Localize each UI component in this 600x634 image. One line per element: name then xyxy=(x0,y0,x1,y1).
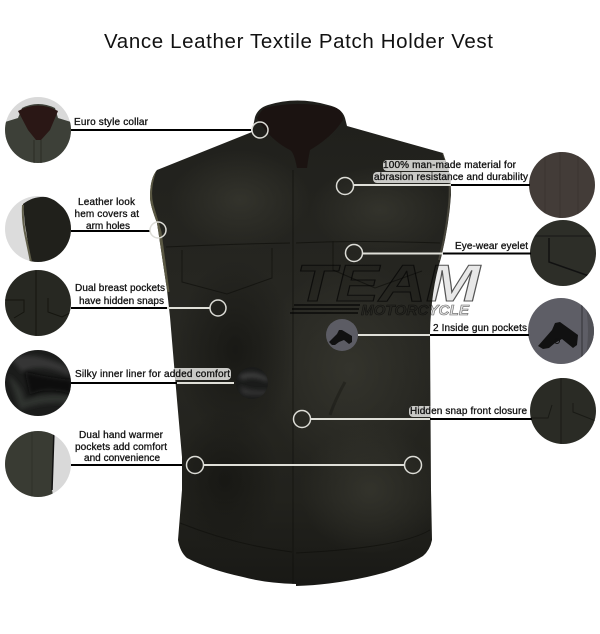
fabric shading xyxy=(206,174,414,528)
callout: Dual breast pockets: Dual breast pockets xyxy=(75,283,165,294)
callout: man-made material xyxy=(336,160,530,194)
inset: gun pocket on vest xyxy=(326,319,358,351)
thumbnail: hand warmer pockets xyxy=(5,431,71,497)
left armhole trim xyxy=(151,170,168,292)
title: Vance Leather Textile Patch Holder Vest xyxy=(104,30,493,53)
thumbnail: silky inner liner xyxy=(5,350,72,416)
callout: Eye-wear eyelet xyxy=(346,241,531,262)
logo: Team Motorcycle: MOTORCYCLE xyxy=(361,302,470,319)
logo: Team Motorcycle: TEAM xyxy=(296,255,482,313)
callout: Euro style collar xyxy=(71,117,268,138)
callout: Hidden snap front closure: Hidden snap front closure xyxy=(410,406,527,417)
callout: Leather look hem xyxy=(71,197,166,238)
inner collar xyxy=(257,104,343,168)
callout: 2 Inside gun pockets: 2 Inside gun pockets xyxy=(433,323,527,334)
thumbnail: Leather look hem xyxy=(5,196,72,265)
callout: Euro style collar: Euro style collar xyxy=(74,117,149,128)
callout: Dual hand warmer pockets: Dual hand warmer xyxy=(79,430,164,441)
callout: Eye-wear eyelet: Eye-wear eyelet xyxy=(455,241,528,252)
thumbnail: breast pockets xyxy=(5,270,72,336)
callout: Leather look hem: Leather look xyxy=(78,197,136,208)
seams and placket xyxy=(166,170,440,584)
thumbnail: hidden snap closure xyxy=(530,378,596,444)
callout: man-made material: abrasion resistance and durability xyxy=(374,172,528,183)
inset: silky liner on vest xyxy=(238,371,268,396)
callout: Dual breast pockets xyxy=(71,283,226,316)
thumbnail: gun pockets xyxy=(528,298,596,365)
callout: man-made material: 100% man-made material for xyxy=(383,160,517,171)
thumbnail: eye-wear eyelet xyxy=(530,220,596,286)
callout: Dual hand warmer pockets xyxy=(71,430,422,474)
callout: Dual breast pockets: have hidden snaps xyxy=(79,296,164,307)
callout: Silky inner liner: Silky inner liner for added comfort xyxy=(75,369,230,380)
callout: Dual hand warmer pockets: and convenience xyxy=(84,453,160,464)
thumbnail: man-made material xyxy=(529,152,595,218)
text halos over vest xyxy=(170,160,463,417)
callout: Dual hand warmer pockets: pockets add comfort xyxy=(75,442,167,453)
thumbnail: Euro style collar xyxy=(5,97,71,165)
callout: Hidden snap front closure xyxy=(294,406,532,428)
right armhole trim xyxy=(439,153,450,260)
callout: Leather look hem: hem covers at xyxy=(74,209,139,220)
icon: small pistol xyxy=(329,330,352,345)
logo: Team Motorcycle xyxy=(290,255,482,319)
callout: Leather look hem: arm holes xyxy=(86,221,130,232)
vest photo xyxy=(150,100,451,586)
icon: pistol xyxy=(538,322,578,349)
